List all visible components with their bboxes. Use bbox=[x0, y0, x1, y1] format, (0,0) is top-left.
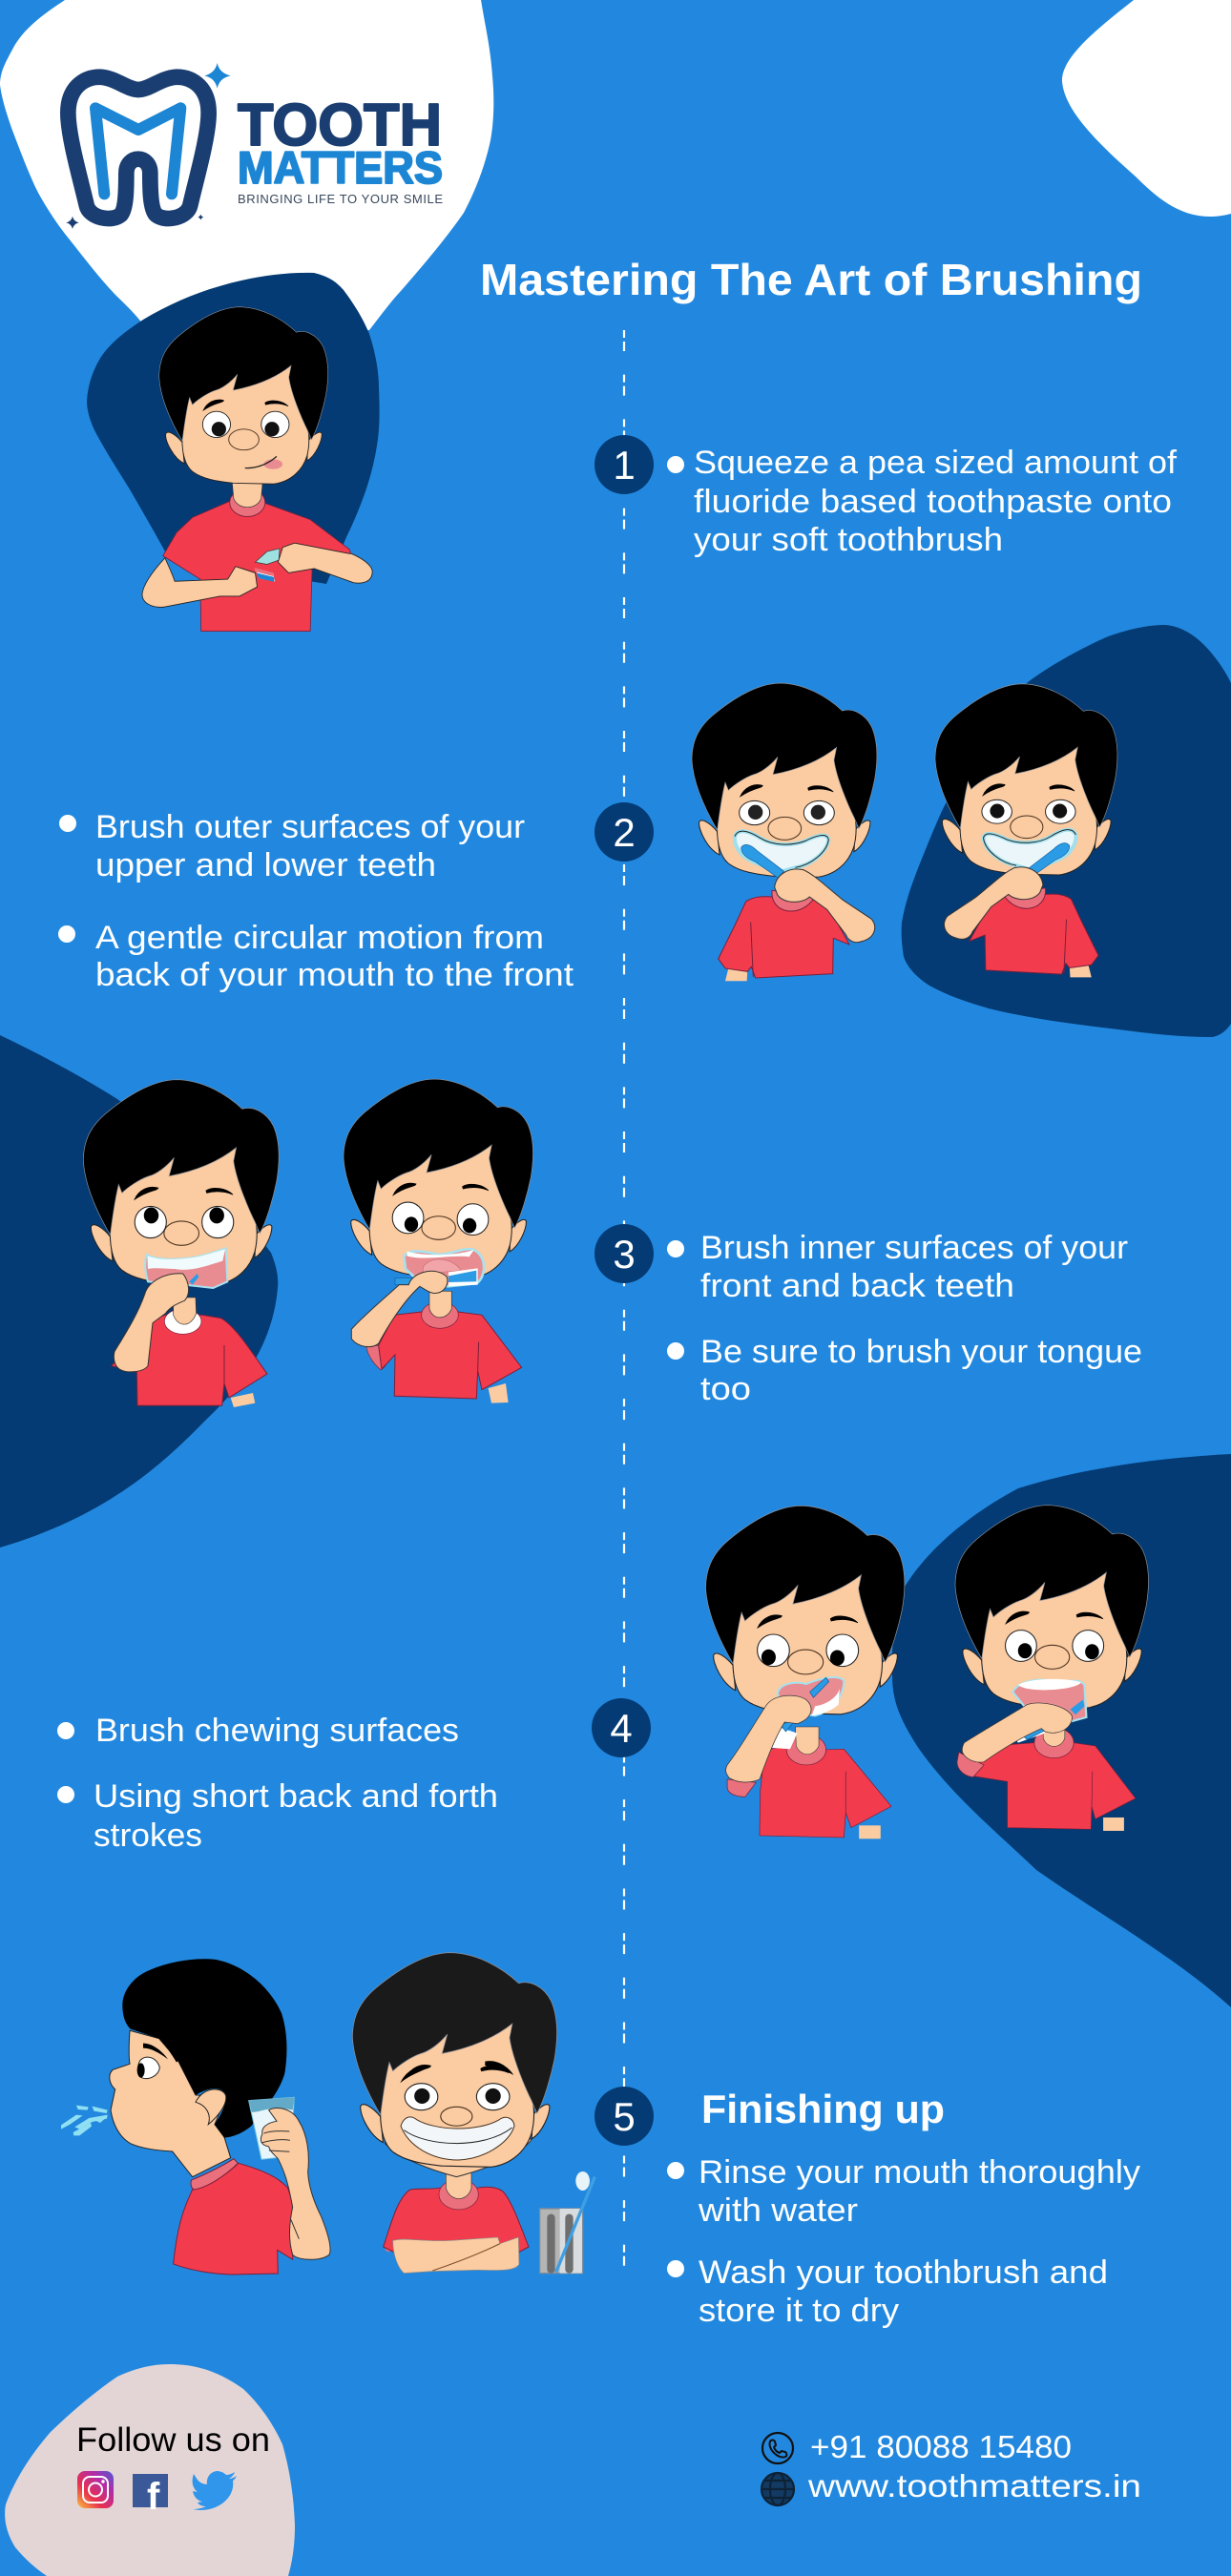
step 3 text: front and back teeth bbox=[700, 1268, 1014, 1304]
icon: instagram bbox=[77, 2471, 114, 2508]
step 3 text: too bbox=[700, 1371, 751, 1407]
glass bbox=[249, 2097, 294, 2159]
step 5 text: Wash your toothbrush and bbox=[699, 2254, 1108, 2291]
step 4 text bbox=[57, 1713, 498, 1854]
step 1 text bbox=[667, 445, 1178, 558]
step 2 text: upper and lower teeth bbox=[95, 847, 436, 883]
logo wordmark: BRINGING LIFE TO YOUR SMILE bbox=[238, 192, 443, 206]
navy blob step 1 bbox=[87, 273, 380, 584]
step 5 text: store it to dry bbox=[699, 2293, 899, 2329]
step 3 number bbox=[595, 1224, 654, 1283]
logo tooth mark bbox=[66, 63, 231, 229]
step 5 number: 5 bbox=[613, 2094, 636, 2139]
illustration: boy rinsing, side view bbox=[61, 1959, 330, 2275]
illustration: boy brushing outer teeth, left side bbox=[935, 684, 1117, 977]
white blob top right bbox=[1062, 0, 1231, 217]
icon: twitter bbox=[193, 2471, 237, 2510]
navy blob step 3 bbox=[0, 1035, 278, 1548]
step 5 number bbox=[595, 2087, 654, 2146]
illustration: boy with toothpaste bbox=[142, 307, 372, 632]
step 4 number bbox=[592, 1698, 651, 1757]
illustration: toothbrush cup bbox=[540, 2171, 595, 2274]
website: www.toothmatters.in bbox=[807, 2468, 1141, 2503]
step 4 text: Brush chewing surfaces bbox=[95, 1713, 459, 1749]
step 4 text: strokes bbox=[94, 1818, 202, 1854]
step 2 text bbox=[58, 809, 574, 993]
step 1 text: your soft toothbrush bbox=[694, 522, 1003, 558]
step 2 text: A gentle circular motion from bbox=[95, 920, 544, 956]
navy blob step 4 bbox=[892, 1454, 1231, 2007]
footer blob bbox=[5, 2364, 295, 2576]
icon: globe bbox=[762, 2473, 794, 2505]
step 2 text: back of your mouth to the front bbox=[95, 957, 574, 993]
step 5 text: Finishing up bbox=[701, 2087, 945, 2131]
logo wordmark bbox=[238, 93, 443, 206]
title: Mastering The Art of Brushing bbox=[480, 255, 1142, 304]
step 3 text: Be sure to brush your tongue bbox=[700, 1334, 1142, 1370]
step 1 text: fluoride based toothpaste onto bbox=[694, 484, 1172, 520]
step 3 text: Brush inner surfaces of your bbox=[700, 1230, 1128, 1266]
follow us label: Follow us on bbox=[76, 2421, 270, 2459]
step 3 text bbox=[667, 1230, 1142, 1407]
phone number: +91 80088 15480 bbox=[810, 2429, 1072, 2464]
step 5 text bbox=[667, 2087, 1140, 2329]
step 1 text: Squeeze a pea sized amount of bbox=[694, 445, 1178, 481]
illustration: boy brushing chewing surfaces, right bbox=[955, 1506, 1148, 1831]
illustration: boy brushing inner teeth, front bbox=[83, 1080, 279, 1407]
logo bbox=[66, 63, 443, 229]
icon: phone bbox=[762, 2433, 793, 2463]
white blob top left bbox=[0, 0, 493, 330]
icon: facebook: f bbox=[147, 2476, 160, 2518]
logo wordmark: TOOTH bbox=[238, 93, 442, 158]
step 2 number bbox=[595, 802, 654, 862]
dashed timeline bbox=[623, 330, 625, 2284]
logo wordmark: MATTERS bbox=[238, 142, 443, 193]
step 4 text: Using short back and forth bbox=[94, 1778, 498, 1815]
navy blob step 2 bbox=[902, 625, 1231, 1037]
step 5 text: Rinse your mouth thoroughly bbox=[699, 2154, 1140, 2191]
step 1 number bbox=[595, 435, 654, 494]
step 3 number: 3 bbox=[613, 1232, 636, 1277]
illustration: smiling boy with arms crossed bbox=[352, 1953, 557, 2274]
illustration: boy brushing chewing surfaces, left bbox=[706, 1506, 905, 1839]
step 2 number: 2 bbox=[613, 810, 636, 855]
water spray bbox=[61, 2106, 108, 2135]
step 2 text: Brush outer surfaces of your bbox=[95, 809, 525, 845]
step 5 text: with water bbox=[698, 2192, 858, 2229]
icon: facebook bbox=[133, 2474, 168, 2518]
illustration: boy brushing outer teeth, right side bbox=[692, 683, 877, 981]
step 4 number: 4 bbox=[610, 1706, 633, 1751]
step 1 number: 1 bbox=[613, 443, 636, 488]
illustration: boy brushing inner teeth and tongue bbox=[344, 1079, 532, 1403]
